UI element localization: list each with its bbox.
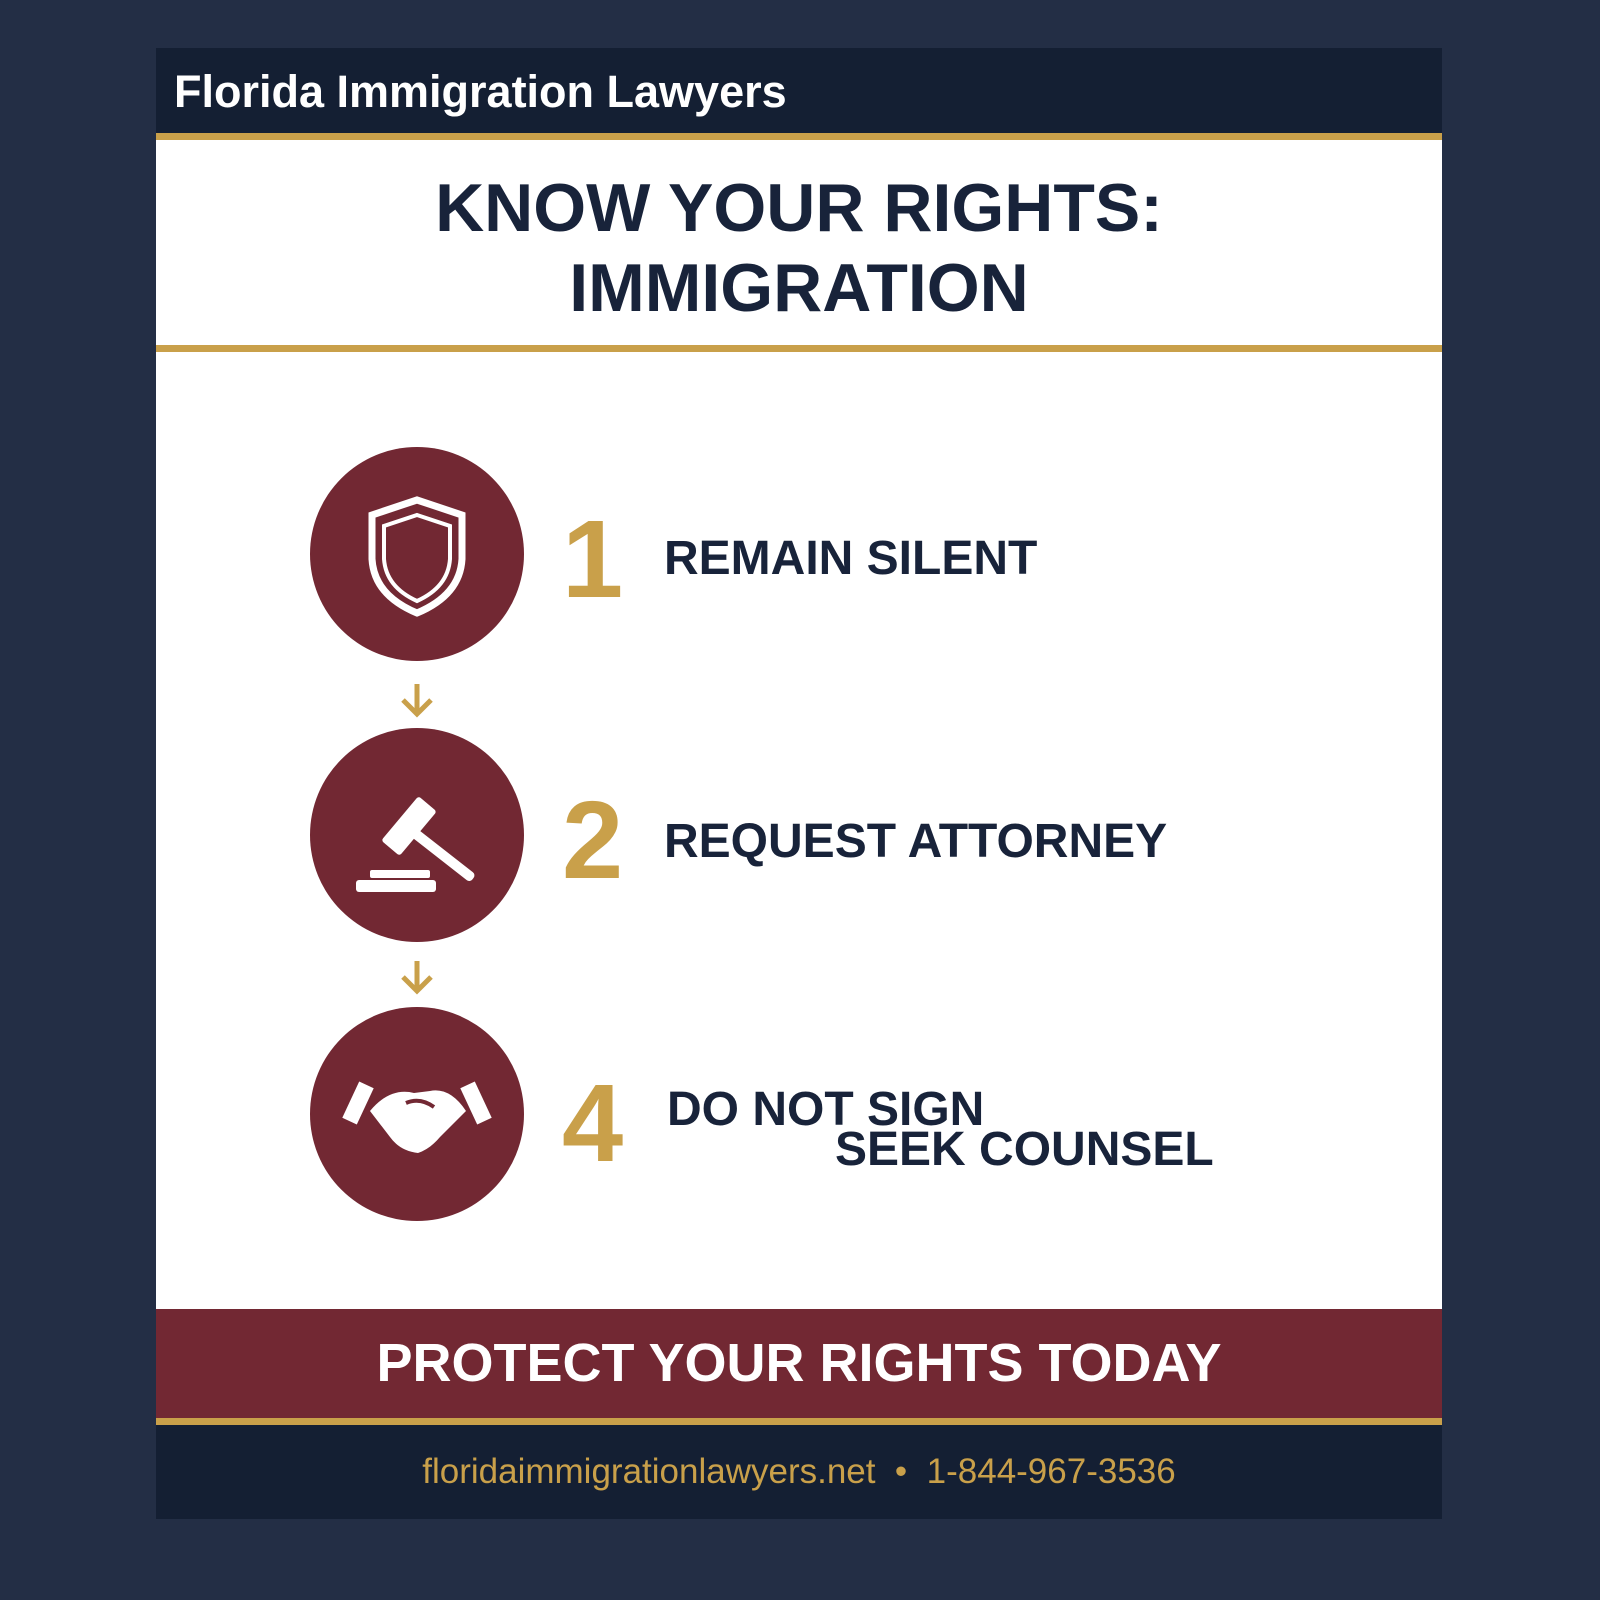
footer contact [156,1425,1442,1519]
step 1 [310,447,1037,661]
label: REMAIN SILENT [664,532,1037,585]
header bar [156,48,1442,140]
footer contact: floridaimmigrationlawyers.net • 1-844-967-3536 [422,1452,1176,1491]
brand name: Florida Immigration Lawyers [174,66,787,117]
number 4: 4 [562,1062,623,1185]
arrow [401,961,433,994]
number 2: 2 [562,779,623,902]
label: DO NOT SIGN [667,1083,984,1136]
banner: call to action [156,1309,1442,1425]
title [435,170,1163,326]
title: IMMIGRATION [569,250,1029,326]
icon: gavel [310,728,524,942]
banner: call to action: PROTECT YOUR RIGHTS TODAY [376,1333,1222,1393]
label: REQUEST ATTORNEY [664,815,1167,868]
icon: shield [310,447,524,661]
arrow [401,684,433,718]
icon: handshake [310,1007,524,1221]
card [156,48,1442,1519]
title: KNOW YOUR RIGHTS: [435,170,1163,246]
number 1: 1 [562,498,623,621]
step 2 [310,728,1167,942]
step 4: SEEK COUNSEL [835,1123,1214,1176]
step 4 [310,1007,1214,1221]
